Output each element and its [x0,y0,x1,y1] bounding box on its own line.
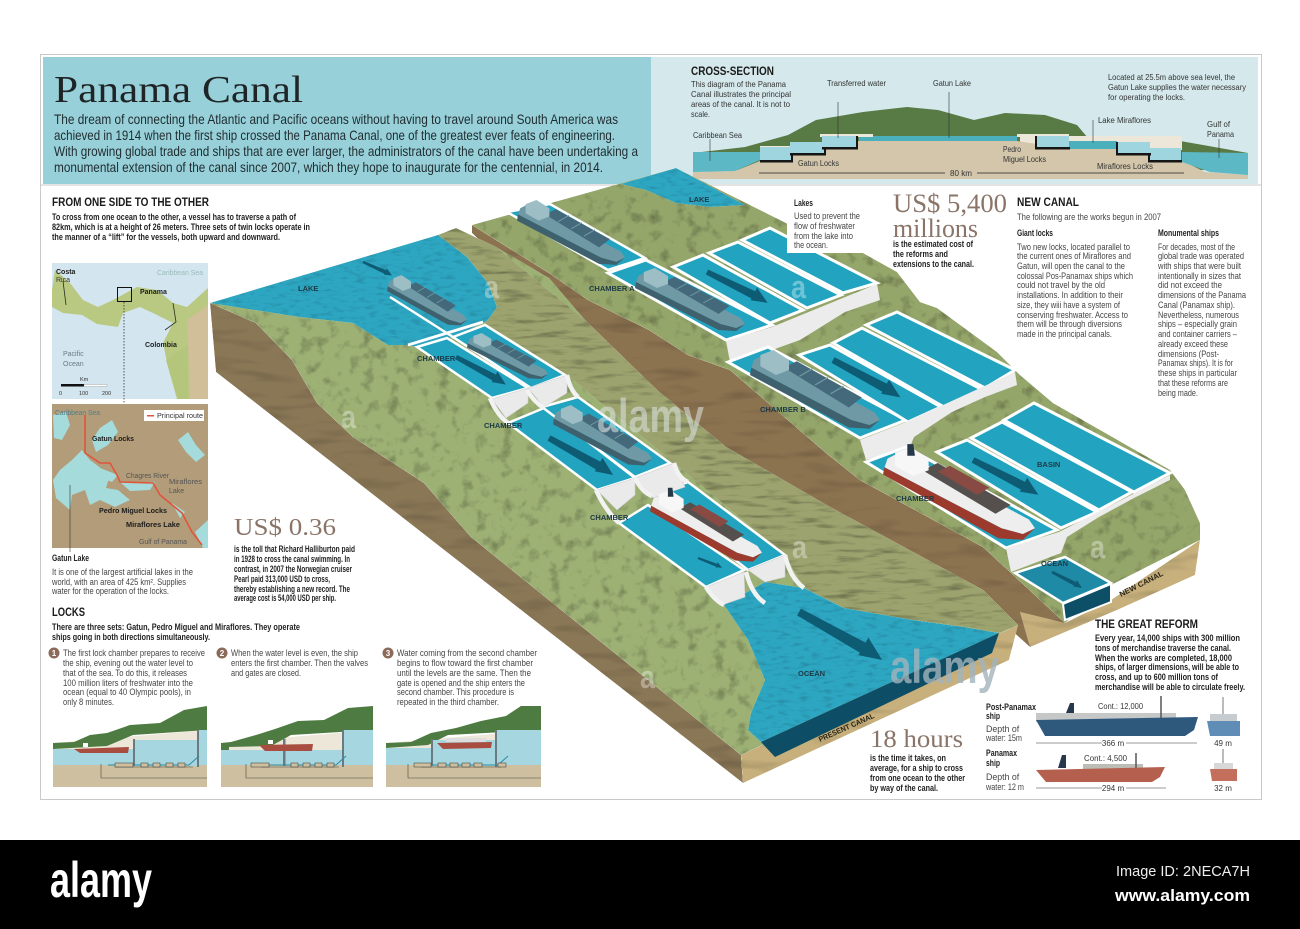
ship comparison: post-panamax: Cont.: 12,000 [1098,702,1144,711]
text: from one side to the other: FROM ONE SIDE TO THE OTHER [52,197,210,209]
text: the great reform: THE GREAT REFORM [1095,619,1198,631]
monumental ships column: dimensions (Post- [1158,349,1219,359]
canal labels: CHAMBER B [760,405,806,414]
monumental ships column: did not exceed the [1158,280,1222,290]
ship: chamber B [750,350,880,429]
text: cost: US$ 5,400 [893,189,1007,218]
route labels: Caribbean Sea [55,410,100,417]
map labels: Panama [140,289,167,296]
callout: lakes: flow of freshwater [794,221,855,231]
watermarks: a [341,399,356,435]
callout: lakes: Lakes [794,198,813,208]
canal labels: LAKE [298,284,318,293]
cross-section text: Gulf of [1207,120,1231,129]
watermarks [341,269,1105,695]
text: 18 hours [870,726,965,793]
text: locks heading: LOCKS [52,607,85,619]
step 3 [382,648,537,707]
step 1: that of the sea. To do this, it releases [63,668,188,678]
monumental ships column: that these reforms are [1158,378,1228,388]
arrow: chamber 3 [697,555,723,570]
cross-section text: Miguel Locks [1003,155,1046,164]
ship: chamber 2 [553,405,652,465]
canal labels: CHAMBER A [589,284,635,293]
step 2: and gates are closed. [231,668,301,678]
ships [387,200,1035,562]
gatun lake leader [69,485,71,552]
giant locks column: them will be through diversions [1017,319,1123,329]
step 2: When the water level is even, the ship [231,648,358,658]
text: 18 hours: from one ocean to the other [870,773,965,783]
text: the great reform: tons of merchandise traverse the canal. [1095,643,1231,653]
route labels: Chagres River [126,473,170,480]
callout: lakes: Used to prevent the [794,211,860,221]
ship comparison: panamax: Cont.: 4,500 [1084,754,1128,763]
present canal terrain block [210,228,1018,783]
text: new canal: The following are the works begun in 2007 [1017,212,1161,222]
monumental ships column: dimensions of the Panama [1158,290,1246,300]
cross-section text: Lake Miraflores [1098,116,1151,125]
central ridge [438,228,1018,633]
step 1: 100 million liters of freshwater into the [63,678,193,688]
route line [85,415,202,545]
giant locks column: installations. In addition to their [1017,290,1123,300]
cross-section text [691,73,1246,171]
cross-section heading: CROSS-SECTION [691,66,774,78]
giant locks column: conserving freshwater. Access to [1017,310,1128,320]
text: toll: is the toll that Richard Halliburton paid [234,544,355,554]
step 1: 1 [52,649,57,658]
monumental ships column: being made. [1158,388,1198,398]
step 3: until the levels are the same. Then the [397,668,531,678]
scale bar [61,384,107,386]
intro text: The dream of connecting the Atlantic and Pacific oceans without having to travel around South America was [54,111,618,127]
canal labels: NEW CANAL [1118,569,1165,599]
cross-section text: Caribbean Sea [693,131,743,140]
route labels: Gulf of Panama [139,539,187,546]
giant locks column: made in the principal canals. [1017,329,1112,339]
text: from one side to the other [52,197,310,242]
ship comparison: panamax: ship [986,758,1000,768]
text: toll: contrast, in 2007 the Norwegian cruiser [234,564,352,574]
step 3: begins to flow toward the first chamber [397,658,533,668]
text: toll: average cost is 54,000 USD per ship. [234,593,336,603]
post-panamax length: 366 m [1102,739,1124,748]
chamber 3 [619,482,785,587]
text: new canal: NEW CANAL [1017,197,1079,209]
monumental ships column: Panamax ships). It is for [1158,358,1233,368]
monumental ships column: intentionally in sizes that [1158,271,1241,281]
ship comparison: panamax: Panamax [986,748,1017,758]
route labels: Miraflores [169,479,203,486]
monumental ships column: Monumental ships [1158,228,1219,238]
cross-section text: for operating the locks. [1108,93,1185,102]
text: cost: extensions to the canal. [893,259,974,269]
panamax front view: 32 m [1214,784,1232,793]
map labels: Km [80,377,89,383]
callout: lakes [787,190,863,253]
cross-section text: Pedro [1003,145,1021,154]
canal labels: LAKE [689,195,709,204]
canal labels: BASIN [1037,460,1060,469]
text: from one side to the other: 82km, which is at a height of 26 meters. Three sets of twin locks operate in [52,222,310,232]
ship comparison: post-panamax: Post-Panamax [986,702,1036,712]
ship comparison: post-panamax: water: 15m [985,733,1022,743]
step 3: repeated in the third chamber. [397,697,499,707]
ship comparison: panamax [985,748,1237,793]
panamax length [1036,784,1166,793]
footer image id: Image ID: 2NECA7H [1116,863,1250,880]
lakes [53,412,208,548]
locator square [118,288,132,302]
text: the great reform: When the works are completed, 18,000 [1095,653,1232,663]
footer logo: alamy [50,852,152,908]
chamber A locks [608,228,877,340]
footer url: www.alamy.com [1114,886,1250,905]
watermarks: alamy [890,640,999,693]
ship: chamber 3 [650,488,762,562]
text: gatun lake: It is one of the largest artificial lakes in the [52,567,193,577]
locator line [123,302,125,408]
cross-section text: Gatun Locks [798,159,839,168]
text: gatun lake: Gatun Lake [52,553,89,563]
ocean [724,582,999,742]
footer bar [0,840,1300,929]
upper lake [621,168,745,207]
watermarks: a [484,269,499,305]
arrow: ocean channel [1051,568,1084,590]
map: isthmus of Panama [52,263,208,399]
ship: approach [517,200,625,265]
valley wall [472,225,1065,647]
ship comparison: post-panamax: Depth of [986,724,1020,734]
arrow: ocean [795,601,888,667]
watermarks: a [791,269,806,305]
text: gatun lake [51,553,193,596]
watermarks: a [640,659,655,695]
step 3: 3 [386,649,391,658]
giant locks column: size, they wiii have a system of [1017,300,1120,310]
post-panamax front view [1207,697,1240,748]
ocean channel cut [1063,584,1111,620]
step 2: 2 [220,649,225,658]
cross-section text: Gatun Lake supplies the water necessary [1108,83,1246,92]
monumental ships column: For decades, most of the [1158,242,1235,252]
text: from one side to the other: To cross from one ocean to the other, a vessel has to traverse a path of [52,212,296,222]
header divider [40,184,1261,186]
cross-section text: Located at 25.5m above sea level, the [1108,73,1236,82]
monumental ships column: Nevertheless, numerous [1158,310,1239,320]
cross-section text: Gatun Lake [933,79,971,88]
left wall [210,303,743,783]
panamax side view [1036,753,1165,782]
canal labels [298,195,1165,744]
ship: chamber A [635,268,745,331]
gate faces [492,375,785,605]
text: cost [893,189,1007,269]
step 3: second chamber. This procedure is [397,687,515,697]
giant locks column: Two new locks, located parallel to [1017,242,1130,252]
text: gatun lake: water for the operation of the locks. [51,586,169,596]
panamax front view [1210,749,1237,793]
intro text [54,111,638,175]
route labels: Miraflores Lake [126,522,180,529]
map labels: Ocean [63,361,84,368]
ship comparison: post-panamax: ship [986,711,1000,721]
cross-section text: This diagram of the Panama [691,80,787,89]
new canal terrain block [472,168,1200,647]
map labels: Colombia [145,342,177,349]
text: toll: Pearl paid 313,000 USD to cross, [234,574,330,584]
ship: chamber 1 [467,333,548,379]
front face [741,625,1018,783]
text: 18 hours: average, for a ship to cross [870,763,963,773]
arrows [362,258,1084,667]
canal labels: CHAMBER [484,421,523,430]
ocean cut [761,633,999,757]
step 1: ocean (equal to 40 Olympic pools), in [63,687,191,697]
cross-section text: Transferred water [827,79,886,88]
panel: header [43,57,651,184]
ship: lake [387,275,467,325]
monumental ships column: with ships that were built [1157,261,1241,271]
new canal front face [1020,540,1200,647]
intro text: With growing global trade and ships that are ever larger, the administrators of the canal have been undertaking a [54,143,638,159]
route legend: Principal route [157,413,203,420]
text: 18 hours: by way of the canal. [870,783,938,793]
intro text: monumental extension of the canal since 2007, which they hope to inaugurate for the centennial, in 2014. [54,159,603,175]
text: cost: is the estimated cost of [893,239,973,249]
lake wall [390,297,453,337]
giant locks column: Giant locks [1017,228,1053,238]
post-panamax side view [1036,696,1198,736]
callout: lakes: from the lake into [794,231,853,241]
text: cost: the reforms and [893,249,948,259]
step 1: only 8 minutes. [63,697,114,707]
route labels: Pedro Miguel Locks [99,508,167,515]
curved wing walls [490,375,804,605]
map labels: 200 [102,391,111,397]
step 1: The first lock chamber prepares to receive [63,648,205,658]
canal labels: OCEAN [798,669,825,678]
giant locks column: the current ones of Miraflores and [1017,251,1131,261]
approach channel [507,204,645,270]
text: 18 hours: 18 hours [870,726,963,753]
ocean channel [1015,557,1111,603]
watermarks: a [1090,529,1105,565]
cross-section leader lines [710,92,1219,161]
cross-section text: Canal illustrates the principal [691,90,791,99]
step 1 [48,648,205,707]
monumental ships column: Canal (Panamax ship). [1158,300,1235,310]
step 2 [216,648,369,678]
arrow: chamber 2 [546,430,618,480]
step 3: gate is opened and the ship enters the [397,678,525,688]
text: the great reform: cross, and up to 600 million tons of [1095,672,1218,682]
text: the great reform: merchandise will be able to circulate freely. [1095,682,1245,692]
route labels: Gatun Locks [92,436,134,443]
ship comparison: post-panamax [985,696,1240,748]
text: from one side to the other: the manner of a “lift” for the vessels, both upward and downward. [52,232,280,242]
canal labels: CHAMBER [417,354,456,363]
cross-section text: Miraflores Locks [1097,162,1153,171]
title: Panama Canal [54,69,303,111]
text: toll: thereby establishing a new record. The [234,584,350,594]
text: cost: millions [893,214,978,243]
chamber B locks [728,312,1015,438]
canal labels: PRESENT CANAL [817,711,876,744]
land surface [210,228,1018,755]
arrow: chamber 1 [454,351,509,389]
route labels [55,410,203,546]
map: canal route [52,404,208,548]
cross-section text: areas of the canal. It is not to [691,100,791,109]
80 km dimension line: 80 km [950,169,972,178]
new canal land surface [472,168,1200,623]
chamber A gate face [726,284,880,362]
ship comparison: panamax: water: 12 m [985,782,1024,792]
lock diagram 2 [221,706,373,787]
text: toll [234,515,355,603]
watermarks: alamy [597,389,704,442]
step 2: enters the first chamber. Then the valves [231,658,369,668]
page frame [40,54,1262,800]
cross-section text: Panama [1207,130,1234,139]
map labels [56,269,203,397]
monumental ships column: already exceed these [1158,339,1228,349]
ship: chamber C [883,444,1035,540]
text: locks heading [52,607,300,642]
lock diagram 3 [386,706,541,787]
arrow: basin A [705,264,772,308]
chamber B gate face [860,372,1017,460]
text: the great reform: Every year, 14,000 ships with 300 million [1095,633,1240,643]
giant locks column: colossal Pos-Panamax ships which [1017,271,1133,281]
panamax length: 294 m [1102,784,1124,793]
arrow: basin B [830,351,905,403]
monumental ships column [1157,228,1246,398]
ship comparison: panamax: Depth of [986,772,1020,782]
map labels: Caribbean Sea [157,270,203,277]
giant locks column: Gatun, will open the canal to the [1017,261,1125,271]
text: gatun lake: world, with an area of 425 km². Supplies [51,577,187,587]
chamber 2 [508,397,670,490]
map labels: Rica [56,277,70,284]
chamber C locks [866,403,1170,548]
intro text: achieved in 1914 when the first ship crossed the Panama Canal, one of the greatest ever feats of engineering. [54,127,615,143]
lake [210,235,497,347]
text: toll: in 1928 to cross the canal swimming. In [234,554,350,564]
canal labels: CHAMBER [590,513,629,522]
cross-section text: scale. [691,110,710,119]
map labels: 0 [59,391,62,397]
map labels: Pacific [63,351,84,358]
text: locks heading: There are three sets: Gatun, Pedro Miguel and Miraflores. They operate [52,622,300,632]
map labels: Costa [56,269,76,276]
callout: lakes: the ocean. [794,240,828,250]
map labels: 100 [79,391,88,397]
giant locks column [1017,228,1133,339]
panel: cross-section [651,57,1258,184]
arrow: lake [362,258,394,278]
step 1: the ship, evening out the water level to [63,658,193,668]
text: locks heading: ships going in both directions simultaneously. [52,632,210,642]
chamber 1 [417,325,565,398]
text: new canal [1017,197,1246,398]
watermarks: a [792,529,807,565]
monumental ships column: and container carriers – [1158,329,1237,339]
route legend [144,410,204,421]
monumental ships column: global trade was operated [1158,251,1244,261]
chamber C gate face [1006,475,1170,572]
monumental ships column: ships – especially grain [1158,319,1237,329]
post-panamax front view: 49 m [1214,739,1232,748]
giant locks column: could not travel by the old [1017,280,1105,290]
text: the great reform [1095,619,1245,692]
canal labels: OCEAN [1041,559,1068,568]
arrow: basin C [970,452,1043,500]
text: toll: US$ 0.36 [234,515,336,541]
lock diagram 1 [53,706,207,787]
monumental ships column: these ships in particular [1158,368,1237,378]
cross-section diagram [693,107,1248,179]
text: the great reform: ships, of larger dimensions, will be able to [1095,662,1240,672]
canal labels: CHAMBER [896,494,935,503]
step 3: Water coming from the second chamber [397,648,537,658]
text: 18 hours: is the time it takes, on [870,753,946,763]
route labels: Lake [169,488,184,495]
